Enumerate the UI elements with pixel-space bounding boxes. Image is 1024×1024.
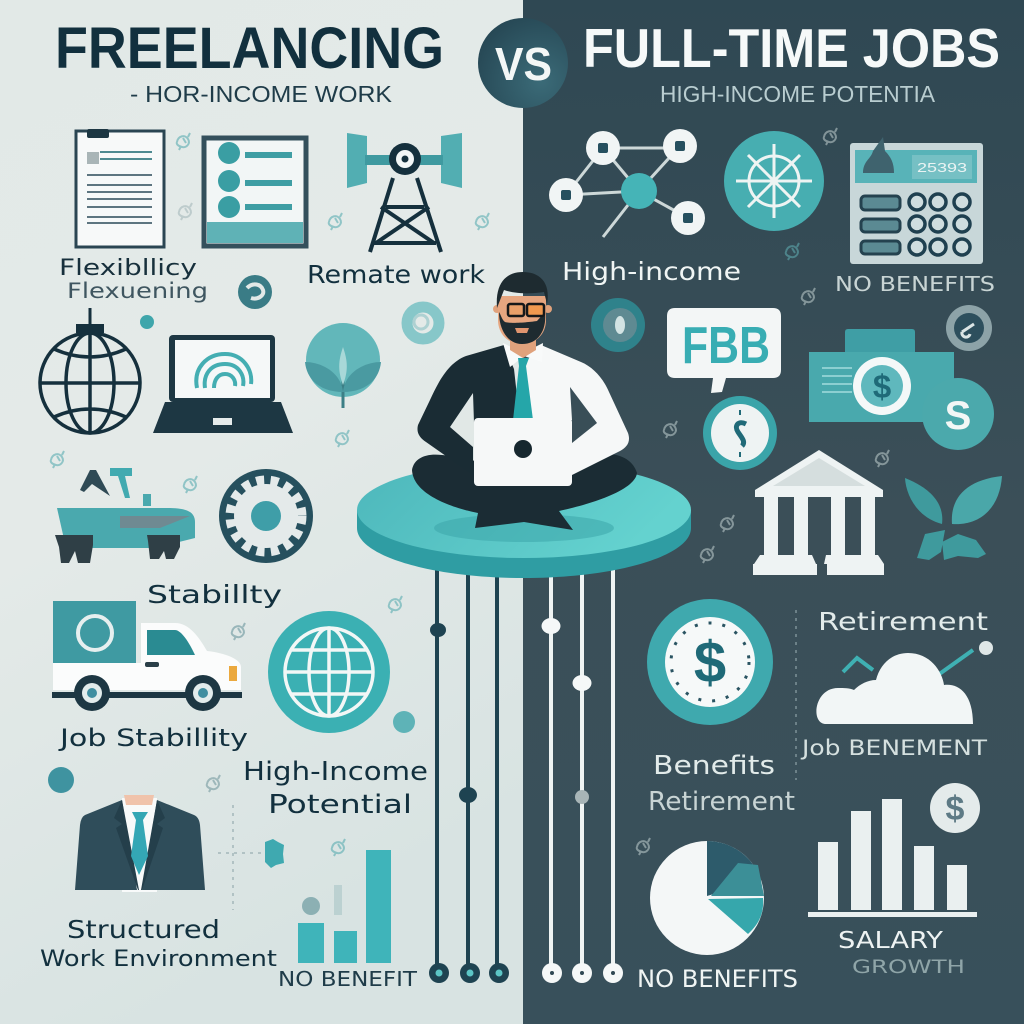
icon: dollar circle bbox=[930, 783, 980, 833]
icon: dollar circle: $ bbox=[946, 790, 965, 828]
person collar and tie bbox=[503, 343, 543, 420]
icon: pale swirl bbox=[407, 307, 439, 339]
label: structured work environment: Structured bbox=[67, 915, 220, 944]
icon: document bbox=[76, 129, 164, 247]
icon: small swirl dark bbox=[238, 275, 272, 309]
icon: grey ring bbox=[946, 305, 992, 351]
label: high-income potential: Potential bbox=[268, 790, 412, 820]
connector nodes bbox=[429, 618, 623, 983]
icon: teal wheel bbox=[724, 131, 824, 231]
icon: dollar dial bbox=[703, 396, 777, 470]
icon: plant circle bbox=[305, 323, 381, 408]
badge: vs bbox=[478, 18, 568, 108]
label: benefits retirement: Retirement bbox=[648, 787, 795, 817]
person torso white bbox=[520, 345, 629, 475]
label: high-income potential bbox=[243, 757, 428, 820]
bar chart: right bbox=[808, 799, 977, 917]
panel: freelancing background bbox=[0, 0, 523, 1024]
label: salary growth: GROWTH bbox=[852, 956, 965, 978]
person head bbox=[493, 272, 552, 358]
icon: checklist board bbox=[204, 138, 306, 246]
icon: teal coin bbox=[591, 298, 645, 352]
label: stability: Stabillty bbox=[147, 580, 282, 609]
icon: dollar cards: $ bbox=[873, 368, 891, 405]
label: structured work environment: Work Environment bbox=[40, 947, 277, 972]
person torso black bbox=[417, 345, 520, 475]
bar chart: left bbox=[298, 850, 391, 963]
icon: fbb speech bubble: FBB bbox=[682, 317, 770, 375]
label: high-income potential: High-Income bbox=[243, 757, 428, 787]
connector lines bbox=[437, 570, 613, 972]
label: retirement: Retirement bbox=[818, 607, 988, 636]
label: flexible learning: Flexuening bbox=[67, 279, 208, 303]
label: benefits retirement bbox=[648, 751, 795, 817]
icon: teal machine bbox=[55, 468, 195, 563]
icon: gear bbox=[219, 469, 313, 563]
label: no benefits bottom: NO BENEFITS bbox=[637, 965, 798, 993]
icon: delivery truck bbox=[52, 601, 242, 711]
label: structured work environment bbox=[40, 915, 277, 972]
icon: dollar cards bbox=[809, 329, 954, 422]
label: salary growth bbox=[838, 928, 965, 978]
dotted divider bbox=[795, 610, 797, 780]
subtitle: high-income work: - HOR-INCOME WORK bbox=[130, 81, 393, 107]
icon: globe bbox=[40, 308, 140, 433]
icon: cloud bbox=[816, 641, 993, 724]
icon: fbb speech bubble bbox=[667, 308, 781, 393]
icon: dotted pointer bbox=[218, 805, 284, 910]
label: flexibility: Flexibllicy bbox=[59, 256, 197, 281]
icon: bank building bbox=[753, 450, 884, 575]
icon: scattered right marks bbox=[637, 128, 889, 855]
label: no benefit: NO BENEFIT bbox=[278, 967, 418, 991]
person legs bbox=[412, 454, 637, 530]
icon: s coin: S bbox=[945, 394, 971, 438]
icon: calculator: 25393 bbox=[917, 160, 967, 175]
label: job benement: Job BENEMENT bbox=[800, 736, 987, 760]
pie chart bbox=[650, 841, 764, 955]
panel: full-time jobs background bbox=[523, 0, 1024, 1024]
platform disc bbox=[357, 462, 691, 578]
icon: calculator bbox=[850, 137, 983, 264]
icon: dollar badge bbox=[647, 599, 773, 725]
icon: leaves bbox=[905, 476, 1002, 560]
icon: scattered left marks bbox=[51, 133, 489, 856]
icon: s coin bbox=[922, 378, 994, 450]
label: no benefits: NO BENEFITS bbox=[835, 272, 995, 296]
label: high-income: High-income bbox=[562, 257, 741, 286]
icon: network bbox=[549, 129, 705, 237]
icon: teal globe bbox=[268, 611, 390, 733]
subtitle: high-income potential: HIGH-INCOME POTENTIA bbox=[660, 81, 936, 107]
title: freelancing: FREELANCING bbox=[55, 16, 444, 81]
icon: laptop bbox=[153, 335, 293, 433]
icon: radio tower bbox=[347, 133, 462, 252]
label: salary growth: SALARY bbox=[838, 928, 944, 954]
icon: dollar badge: $ bbox=[694, 630, 726, 695]
label: benefits retirement: Benefits bbox=[653, 751, 775, 781]
laptop bbox=[474, 418, 572, 486]
icon: suit bbox=[75, 795, 205, 892]
label: remote work: Remate work bbox=[307, 260, 486, 289]
icon: small teal marks bbox=[48, 315, 415, 793]
central figure on platform bbox=[357, 272, 691, 578]
label: job stability: Job Stabillity bbox=[57, 724, 248, 752]
badge: vs: VS bbox=[495, 38, 552, 90]
